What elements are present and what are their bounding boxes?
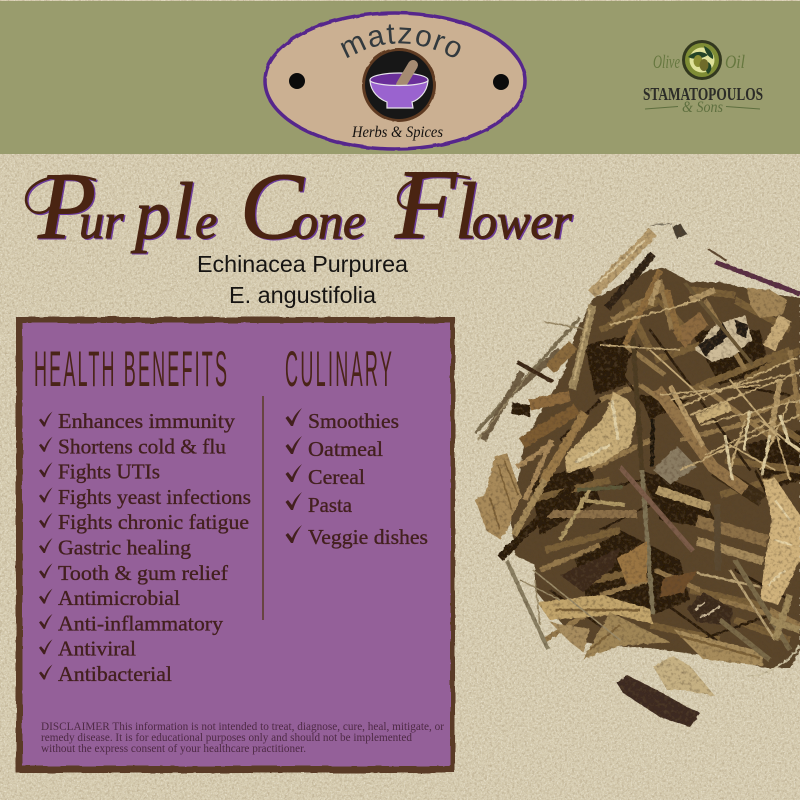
title: P — [38, 154, 97, 260]
list: culinary: Veggie dishes — [308, 525, 428, 549]
logo: right hole — [493, 74, 509, 90]
list: health benefits: Fights yeast infections — [58, 485, 251, 509]
list: health benefits: Anti-inflammatory — [58, 611, 224, 635]
herb photo: dried echinacea root pile — [475, 223, 800, 727]
disclaimer: remedy disease. It is for educational purposes only and should not be implemented — [41, 732, 412, 744]
logo: mortar and pestle icon — [362, 48, 436, 122]
title: p — [131, 178, 171, 255]
purple stick — [715, 262, 800, 294]
mid brown sticks — [530, 290, 800, 640]
heading: culinary: CULINARY — [285, 341, 392, 397]
tall vertical stem — [633, 338, 642, 470]
dark gaps — [530, 330, 800, 620]
disclaimer: DISCLAIMER This information is not intended to treat, diagnose, cure, heal, mitigate, or — [41, 721, 444, 733]
title: ur — [80, 194, 125, 250]
soft base of pile — [510, 268, 800, 668]
title: P — [37, 153, 96, 259]
detached pale piece — [653, 656, 715, 696]
list: health benefits: Fights UTIs — [58, 460, 160, 484]
title: e — [195, 193, 217, 249]
list: health benefits: Fights chronic fatigue — [58, 510, 249, 534]
title: F — [395, 150, 458, 261]
left chunk — [475, 453, 522, 539]
title: ur — [79, 193, 124, 249]
title: C — [241, 154, 306, 260]
brand: Olive: Olive — [653, 52, 680, 73]
list: health benefits: Enhances immunity — [58, 409, 236, 433]
brand: & Sons: & Sons — [682, 99, 723, 116]
title: e — [196, 194, 219, 250]
title: one — [294, 194, 367, 250]
title: l — [456, 169, 479, 257]
title: p — [130, 177, 170, 254]
list: culinary: Smoothies — [308, 409, 399, 433]
panel frame — [16, 317, 455, 773]
title: l — [455, 168, 477, 256]
heading: health benefits: HEALTH BENEFITS — [34, 341, 227, 397]
list: health benefits: Gastric healing — [58, 536, 192, 560]
list: health benefits: Antibacterial — [58, 662, 172, 686]
list: health benefits — [39, 409, 251, 686]
title — [26, 149, 574, 261]
title: F — [394, 149, 457, 260]
title: l — [172, 168, 194, 256]
right big pale chunk — [760, 478, 800, 605]
disclaimer — [41, 721, 444, 755]
Stamatopoulos logo — [643, 40, 763, 116]
title: ower — [473, 194, 574, 250]
straw fan — [600, 300, 800, 480]
title: ower — [472, 193, 573, 249]
logo: left hole — [289, 73, 305, 89]
title: one — [293, 193, 365, 249]
panel: benefits and culinary — [16, 317, 455, 773]
mottled black and white patch — [695, 315, 752, 362]
top stick — [607, 254, 653, 308]
upper right chunks — [747, 288, 787, 318]
thin dark stems — [550, 330, 790, 650]
subtitle: alternate species: E. angustifolia — [229, 282, 376, 308]
detached dark root — [617, 675, 700, 727]
olive badge icon — [682, 40, 722, 80]
logo: wordmark: matzoro — [340, 24, 460, 58]
header band — [0, 1, 800, 154]
main diagonal stick — [715, 470, 762, 500]
list: health benefits: Antiviral — [58, 637, 136, 661]
list: culinary: Cereal — [308, 465, 365, 489]
subtitle: species: Echinacea Purpurea — [197, 251, 408, 277]
disclaimer: without the express consent of your healthcare practitioner. — [41, 743, 306, 755]
list: health benefits: Tooth & gum relief — [58, 561, 228, 585]
list: culinary: Oatmeal — [308, 437, 383, 461]
list: culinary — [286, 408, 428, 549]
title: l — [173, 169, 196, 257]
list: health benefits: Antimicrobial — [58, 586, 180, 610]
lower sticks — [547, 510, 637, 518]
title: C — [240, 153, 305, 259]
list: culinary: Pasta — [308, 493, 353, 517]
pale curled chunk — [565, 392, 637, 473]
logo: tagline: Herbs & Spices — [351, 124, 443, 141]
list: health benefits: Shortens cold & flu — [58, 434, 226, 458]
detached top bit — [672, 223, 687, 239]
logo: wooden oval — [265, 13, 525, 149]
brand: Oil: Oil — [725, 52, 745, 73]
left-side long sticks — [475, 318, 580, 433]
matzoro logo — [263, 10, 527, 151]
